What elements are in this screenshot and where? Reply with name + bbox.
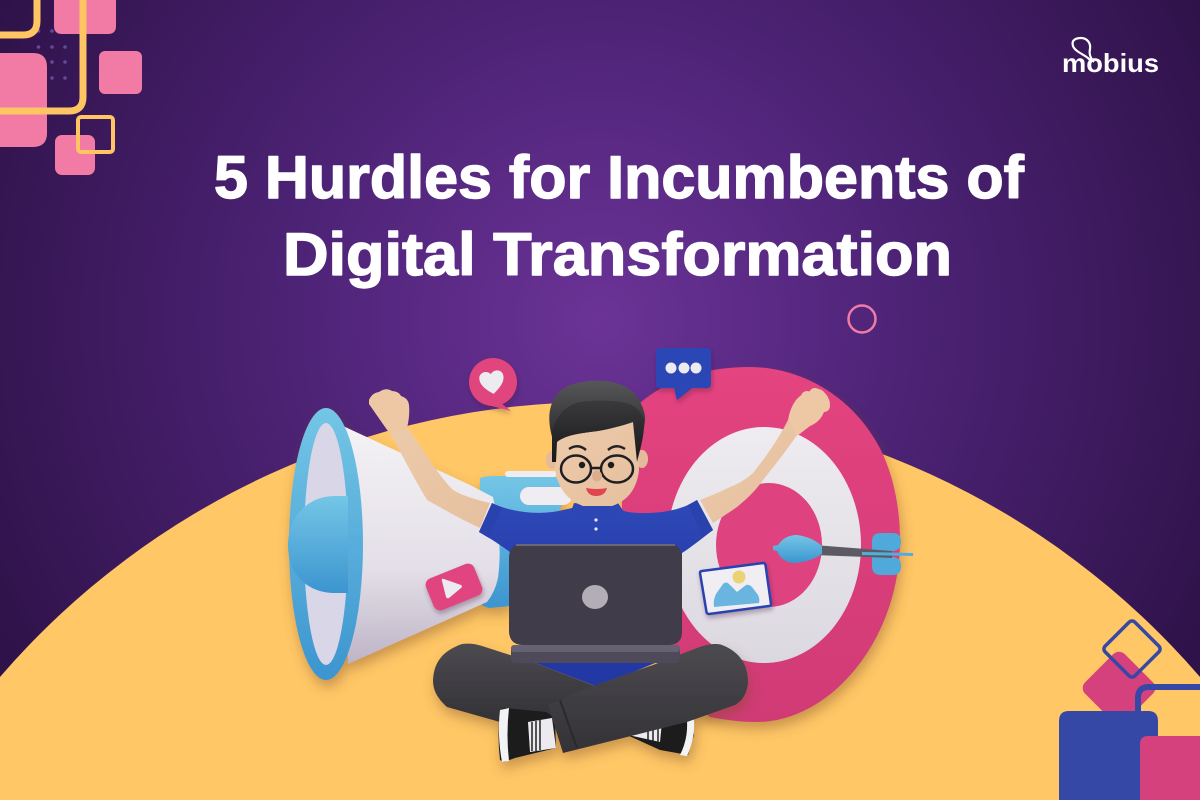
title: 5 Hurdles for Incumbents of (214, 144, 1025, 211)
target board (622, 367, 900, 722)
person: legs and shoes (433, 644, 748, 762)
arms (369, 388, 830, 528)
dart (773, 533, 913, 575)
yellow hill (0, 402, 1200, 800)
title: Digital Transformation (283, 221, 952, 288)
laptop (509, 544, 682, 663)
megaphone (288, 408, 562, 680)
decoration: top-left squares (0, 0, 142, 175)
title (214, 144, 1025, 288)
white pills behind head (505, 471, 572, 505)
person: head (546, 381, 648, 506)
play button (424, 561, 484, 613)
decoration: bottom-right squares (1059, 619, 1200, 800)
person: shirt (479, 500, 713, 620)
icon: chat bubble (656, 348, 711, 400)
image card (700, 563, 771, 614)
decorative ring (848, 306, 876, 332)
icon: heart bubble (469, 358, 517, 411)
logo: mobius: mobius (1062, 48, 1159, 78)
